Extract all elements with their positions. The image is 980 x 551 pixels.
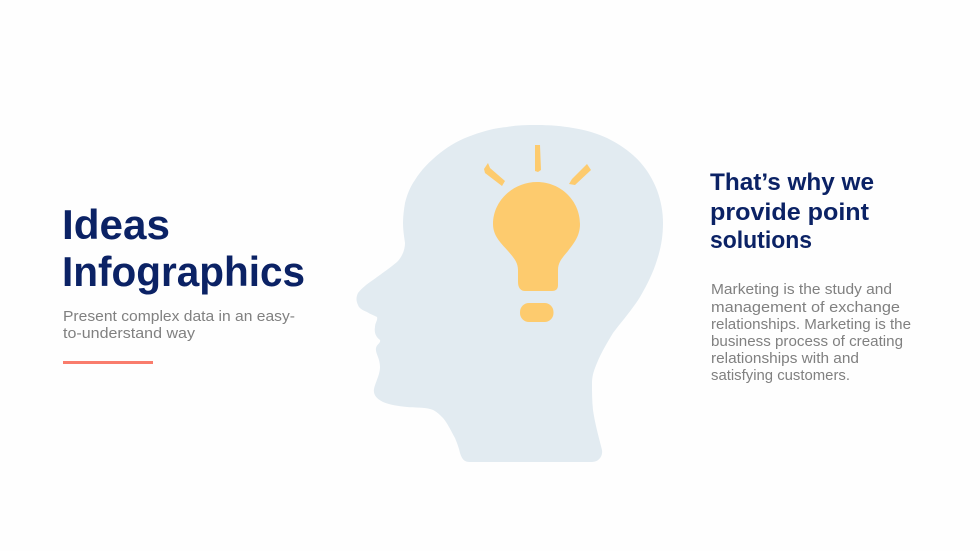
title [62,201,305,295]
title: Infographics [62,248,305,295]
bulb base [520,303,554,322]
body text: management of exchange [711,299,900,316]
heading: provide point [710,199,869,226]
heading [710,169,874,254]
head silhouette [356,125,663,462]
bulb [493,182,580,291]
panel: explanation text [710,169,911,384]
heading: That’s why we [710,169,874,196]
subtitle: Present complex data in an easy- [63,308,295,325]
subtitle: to-understand way [63,325,196,342]
heading: solutions [710,227,812,254]
body text: relationships. Marketing is the [711,316,911,333]
light ray: top [535,145,541,172]
panel: title block [62,201,305,364]
body text: relationships with and [711,350,859,367]
body text [711,281,911,384]
subtitle [63,308,295,342]
light ray: right [569,164,591,185]
body text: business process of creating [711,333,903,350]
icon: head with light bulb [356,125,663,462]
body text: Marketing is the study and [711,281,892,298]
accent underline [63,361,153,364]
light ray: left [484,163,505,186]
body text: satisfying customers. [711,367,850,384]
title: Ideas [62,201,170,248]
